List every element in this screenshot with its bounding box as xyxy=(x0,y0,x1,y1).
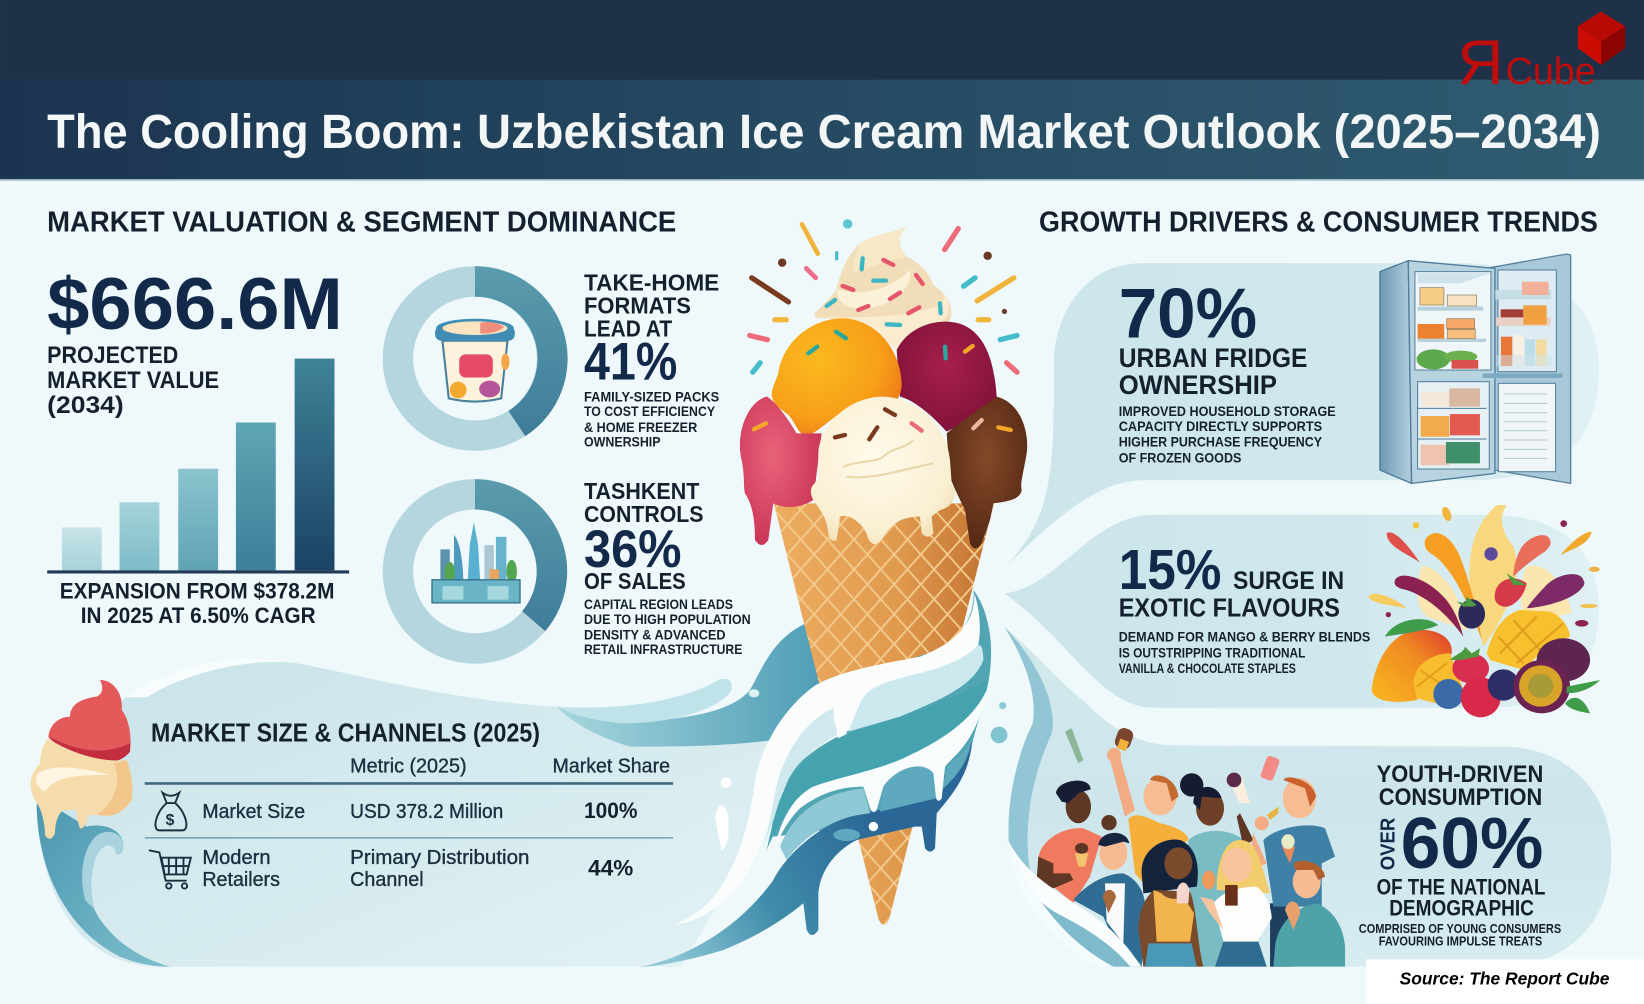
text: exotic flavours xyxy=(1119,538,1370,676)
chart caption: IN 2025 AT 6.50% CAGR xyxy=(81,603,316,628)
table: market size and channels xyxy=(145,719,673,891)
donut: Tashkent 36% xyxy=(398,479,567,648)
illustration: swirling wave xyxy=(640,590,1007,967)
table: market size and channels: 100% xyxy=(584,798,637,823)
text: take-home: LEAD AT xyxy=(584,316,672,342)
table: market size and channels: USD 378.2 Million xyxy=(350,801,503,823)
text: fridge ownership: 70% xyxy=(1119,274,1257,353)
source note: Source: The Report Cube xyxy=(1400,968,1609,988)
text: youth consumption: CONSUMPTION xyxy=(1379,784,1542,811)
text: youth consumption: YOUTH-DRIVEN xyxy=(1377,761,1543,788)
table: market size and channels: MARKET SIZE & CHANNELS (2025) xyxy=(151,719,540,747)
text: fridge ownership: URBAN FRIDGE xyxy=(1119,342,1307,373)
wave arm behind cone xyxy=(557,622,827,747)
table: market size and channels: Channel xyxy=(350,869,424,891)
text: Tashkent: 36% xyxy=(584,521,682,579)
table: market size and channels: Market Share xyxy=(553,756,670,778)
text: Tashkent: DUE TO HIGH POPULATION xyxy=(584,611,751,627)
text: fridge ownership xyxy=(1119,274,1336,465)
text: youth consumption xyxy=(1359,761,1561,949)
text: exotic flavours: SURGE IN xyxy=(1233,567,1344,595)
text: take-home: 41% xyxy=(584,334,677,392)
text: take-home: & HOME FREEZER xyxy=(584,419,697,435)
text: exotic flavours: 15% xyxy=(1119,538,1221,601)
headline value: MARKET VALUE xyxy=(47,367,219,394)
table: market size and channels: 44% xyxy=(588,855,633,880)
text: exotic flavours: EXOTIC FLAVOURS xyxy=(1119,592,1340,622)
text: take-home xyxy=(584,269,719,450)
table: market size and channels: Modern xyxy=(202,847,271,869)
splash: white wave at group's lower left xyxy=(1008,839,1143,967)
text: Tashkent: RETAIL INFRASTRUCTURE xyxy=(584,641,742,657)
icon: money bag: $ xyxy=(166,812,175,829)
title: Uzbekistan Ice Cream Market Outlook (2025–2034) xyxy=(477,105,1601,159)
text: take-home: FAMILY-SIZED PACKS xyxy=(584,389,719,405)
text: fridge ownership: OF FROZEN GOODS xyxy=(1119,449,1241,465)
text: Tashkent: CONTROLS xyxy=(584,501,704,527)
text: take-home: OWNERSHIP xyxy=(584,434,661,450)
table: market size and channels: Primary Distribution xyxy=(350,847,529,869)
icon: money bag xyxy=(155,793,186,830)
headline value xyxy=(47,263,343,419)
illustration: fruit splash xyxy=(1368,505,1600,717)
text: exotic flavours: IS OUTSTRIPPING TRADITIONAL xyxy=(1119,644,1306,660)
table: market size and channels: Retailers xyxy=(202,869,280,891)
title: The Cooling Boom: xyxy=(47,105,464,159)
panel: exotic flavours bubble xyxy=(1004,515,1599,708)
logo: RCube: Cube xyxy=(1506,50,1596,92)
heading: market valuation: MARKET VALUATION & SEGMENT DOMINANCE xyxy=(47,206,676,238)
source note xyxy=(1366,959,1644,1004)
text: Tashkent: TASHKENT xyxy=(584,478,699,504)
illustration: ice cream cone xyxy=(774,503,994,925)
header banner xyxy=(0,0,1644,181)
decorations: sprinkles xyxy=(750,219,1017,372)
text: Tashkent xyxy=(584,478,751,657)
text: exotic flavours: VANILLA & CHOCOLATE STAPLES xyxy=(1119,660,1296,676)
illustration: whipped cream and scoops xyxy=(740,226,1027,548)
icon: city skyline xyxy=(432,522,520,603)
text: Tashkent: CAPITAL REGION LEADS xyxy=(584,596,733,612)
bar chart xyxy=(47,359,349,574)
text: take-home: TO COST EFFICIENCY xyxy=(584,403,716,419)
text: Tashkent: OF SALES xyxy=(584,568,686,594)
panel: youth consumption bubble xyxy=(1004,627,1611,967)
text: exotic flavours: DEMAND FOR MANGO & BERRY BLENDS xyxy=(1119,629,1370,645)
headline value: (2034) xyxy=(47,392,124,419)
table: market size and channels: Metric (2025) xyxy=(350,756,467,778)
text: take-home: FORMATS xyxy=(584,292,691,318)
text: fridge ownership: CAPACITY DIRECTLY SUPPORTS xyxy=(1119,418,1322,434)
text: Tashkent: DENSITY & ADVANCED xyxy=(584,627,726,643)
icon: soft-serve swirl with wave xyxy=(31,680,170,967)
text: take-home: TAKE-HOME xyxy=(584,269,719,295)
table: market size and channels: Market Size xyxy=(202,801,305,823)
illustration: open fridge xyxy=(1380,254,1571,483)
text: youth consumption: OVER xyxy=(1377,818,1399,870)
donut: take-home 41% xyxy=(398,266,568,436)
text: youth consumption: DEMOGRAPHIC xyxy=(1389,895,1534,920)
text: youth consumption: 60% xyxy=(1401,804,1543,884)
text: youth consumption: OF THE NATIONAL xyxy=(1377,874,1545,899)
text: fridge ownership: HIGHER PURCHASE FREQUENCY xyxy=(1119,434,1323,450)
text: youth consumption: COMPRISED OF YOUNG CONSUMERS xyxy=(1359,921,1561,936)
logo: RCube xyxy=(1457,12,1625,98)
panel: fridge ownership bubble xyxy=(1007,263,1599,566)
headline value: PROJECTED xyxy=(47,342,178,369)
logo: RCube: Я xyxy=(1457,28,1503,98)
text: fridge ownership: OWNERSHIP xyxy=(1119,369,1277,400)
headline value: $666.6M xyxy=(47,263,343,345)
text: fridge ownership: IMPROVED HOUSEHOLD STORAGE xyxy=(1119,403,1336,419)
chart caption: EXPANSION FROM $378.2M xyxy=(60,579,334,604)
icon: shopping cart xyxy=(149,850,191,889)
illustration: group of young people xyxy=(1037,726,1345,967)
text: youth consumption: FAVOURING IMPULSE TREATS xyxy=(1379,934,1543,949)
chart caption xyxy=(60,579,334,628)
panel: market size wave xyxy=(40,658,776,967)
heading: growth drivers: GROWTH DRIVERS & CONSUMER TRENDS xyxy=(1039,206,1598,238)
icon: ice cream tub xyxy=(435,319,515,402)
